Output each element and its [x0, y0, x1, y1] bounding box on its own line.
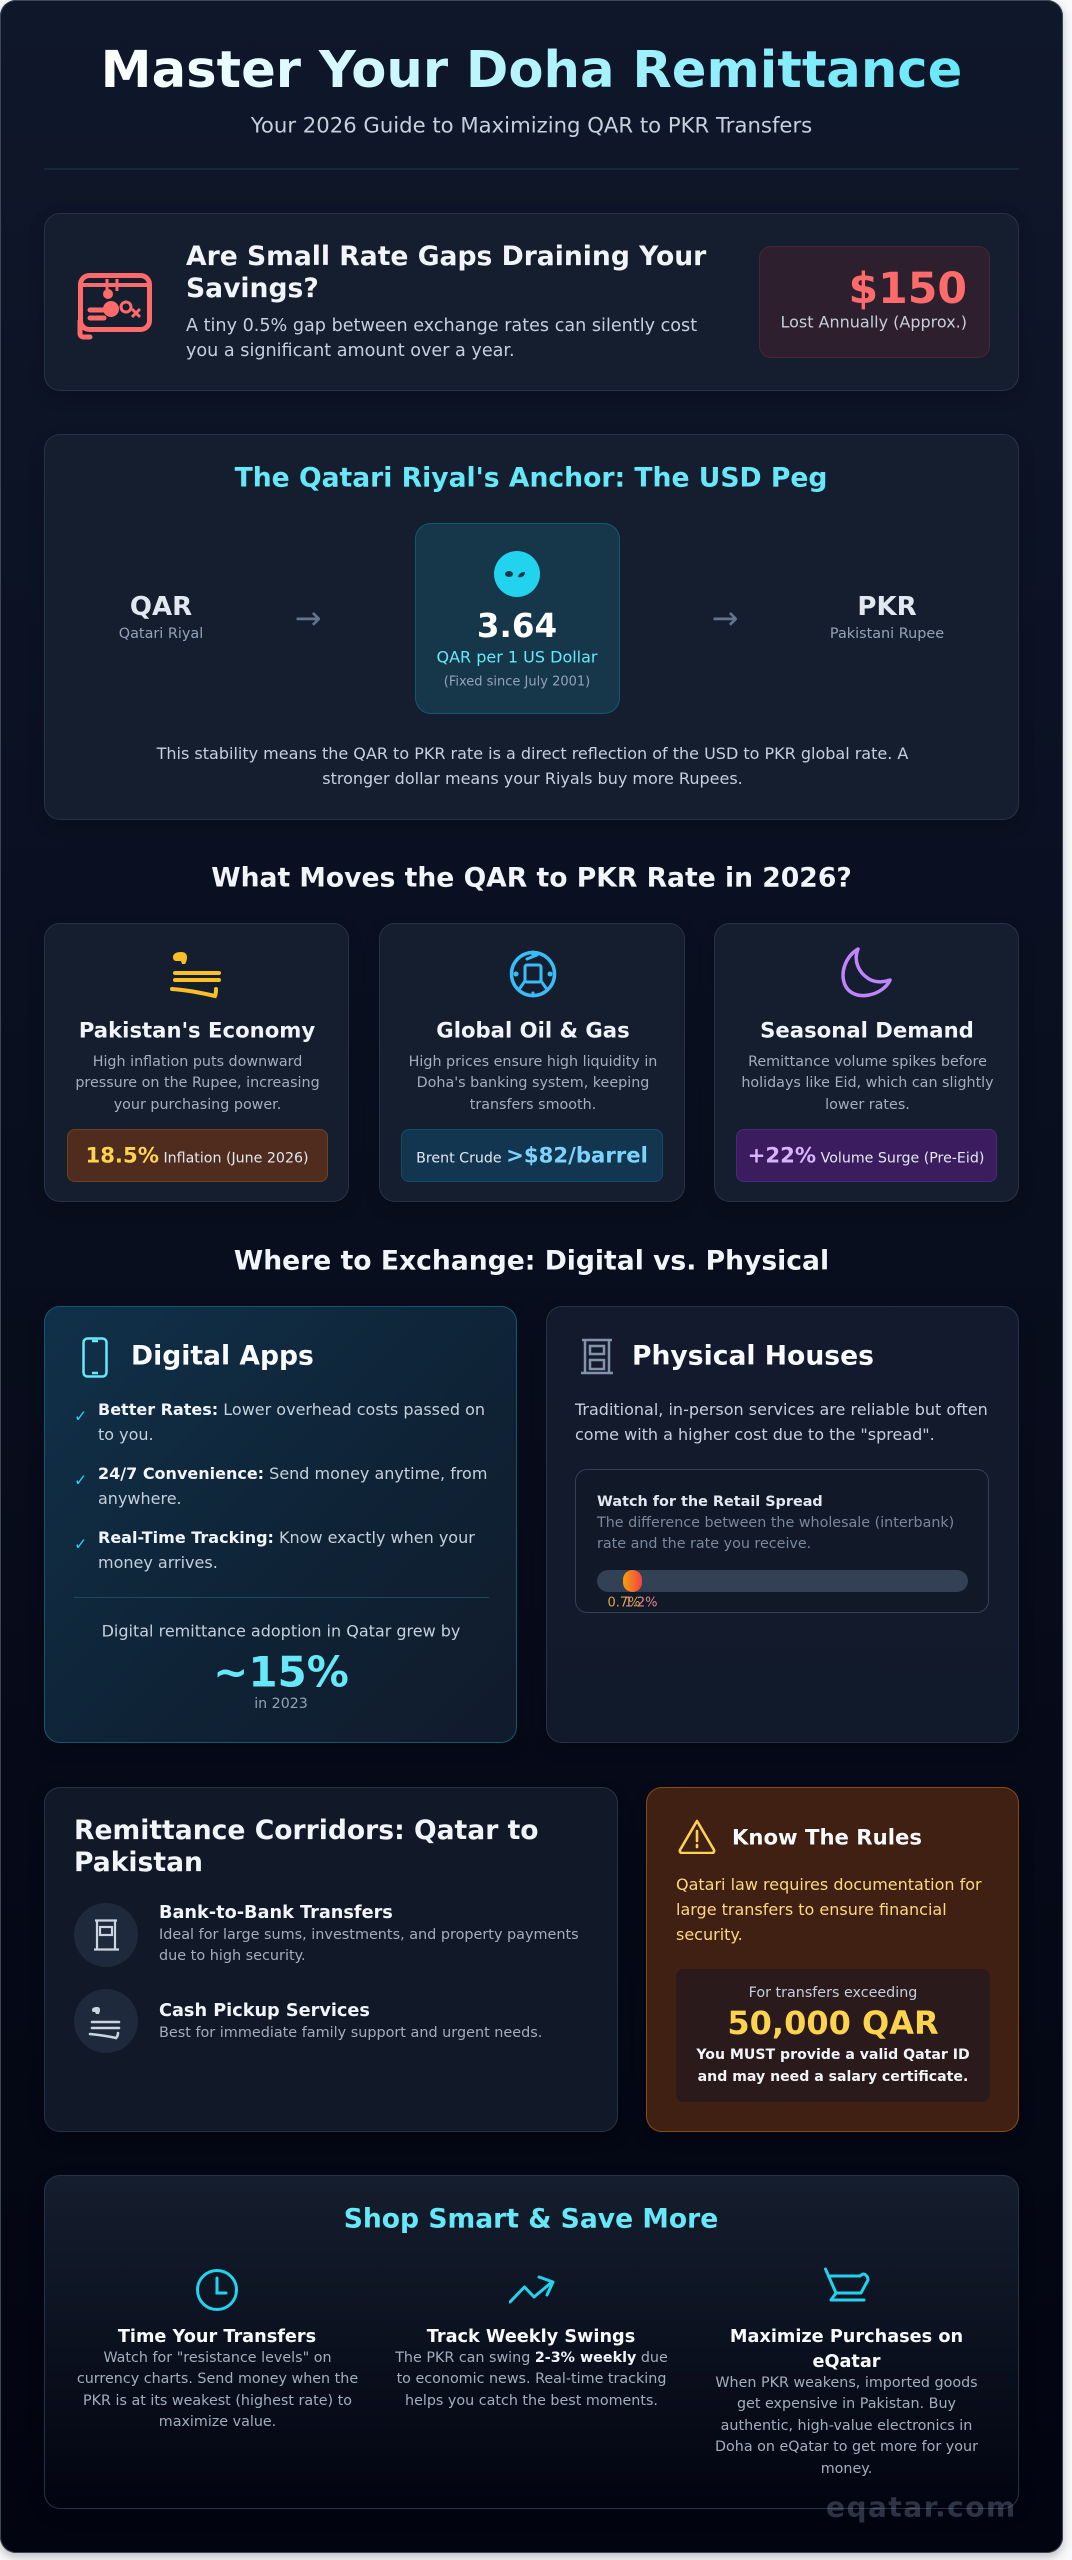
- card description: [409, 1054, 657, 1113]
- threshold value: 50,000 QAR: [727, 2004, 939, 2042]
- card title: Global Oil & Gas: [436, 1018, 630, 1042]
- icon: shopping cart: [824, 2268, 870, 2302]
- description: you a significant amount over a year.: [186, 341, 515, 361]
- box title: Watch for the Retail Spread: [597, 1494, 823, 1510]
- description: large transfers to ensure financial: [676, 1900, 947, 1919]
- description: Traditional, in-person services are reliable but often: [575, 1400, 988, 1419]
- corridor description: due to high security.: [159, 1948, 306, 1964]
- heading: [186, 241, 706, 304]
- spread bar: [597, 1570, 968, 1592]
- card description: High prices ensure high liquidity in: [409, 1054, 657, 1070]
- explanation: This stability means the QAR to PKR rate is a direct reflection of the USD to PKR global rate. A: [157, 744, 908, 763]
- heading: Pakistan: [74, 1847, 203, 1878]
- tip description: Watch for "resistance levels" on: [103, 2350, 332, 2366]
- tip description: maximize value.: [159, 2414, 276, 2430]
- panel: USD peg: [44, 434, 1019, 820]
- QAR label: Qatari Riyal: [119, 626, 203, 642]
- card description: holidays like Eid, which can slightly: [741, 1075, 994, 1091]
- tip title: [730, 2327, 963, 2372]
- peg unit: QAR per 1 US Dollar: [436, 648, 598, 666]
- description: [676, 1875, 982, 1944]
- checklist: to you.: [98, 1425, 154, 1444]
- checklist: anywhere.: [98, 1489, 182, 1508]
- checklist: 24/7 Convenience: Send money anytime, from: [98, 1464, 487, 1483]
- corridor title: Cash Pickup Services: [159, 2001, 370, 2021]
- panel: rate gap problem: [44, 213, 1019, 391]
- arrow: →: [712, 599, 738, 637]
- icon: money lines: [170, 952, 221, 998]
- tip description: get expensive in Pakistan. Buy: [737, 2396, 956, 2412]
- tip description: When PKR weakens, imported goods: [715, 2375, 978, 2391]
- description: Qatari law requires documentation for: [676, 1875, 982, 1894]
- icon: rate gap ticket: [78, 273, 152, 340]
- stat: annual loss: [759, 246, 990, 358]
- tip description: to economic news. Real-time tracking: [397, 2371, 666, 2387]
- PKR label: [830, 592, 944, 642]
- card description: Remittance volume spikes before: [748, 1054, 987, 1070]
- section heading: rate drivers: What Moves the QAR to PKR Rate in 2026?: [211, 862, 852, 894]
- adoption stat: Digital remittance adoption in Qatar grew by: [102, 1622, 460, 1640]
- section heading: where to exchange: Where to Exchange: Digital vs. Physical: [234, 1246, 829, 1276]
- explanation: stronger dollar means your Riyals buy more Rupees.: [322, 769, 743, 788]
- tip description: authentic, high-value electronics in: [721, 2418, 972, 2434]
- panel: physical houses: [546, 1306, 1019, 1743]
- tip description: [715, 2375, 978, 2477]
- heading: [74, 1815, 539, 1878]
- description: come with a higher cost due to the "spread".: [575, 1425, 935, 1444]
- card description: lower rates.: [825, 1097, 910, 1113]
- panel: shop smart: [44, 2175, 1019, 2509]
- box description: The difference between the wholesale (interbank): [597, 1515, 954, 1531]
- adoption stat: in 2023: [254, 1696, 308, 1712]
- checklist: ✓: [74, 1534, 87, 1554]
- card description: Doha's banking system, keeping: [417, 1075, 649, 1091]
- stat badge: [67, 1129, 328, 1182]
- retail spread box: [575, 1469, 989, 1613]
- tip title: Track Weekly Swings: [427, 2327, 635, 2347]
- card description: [75, 1054, 320, 1113]
- icon: clock: [196, 2269, 238, 2311]
- heading: The Qatari Riyal's Anchor: The USD Peg: [235, 462, 827, 494]
- tip description: PKR is at its weakest (highest rate) to: [83, 2393, 352, 2409]
- icon: crescent moon: [841, 947, 892, 998]
- title: Master Your Doha Remittance: [101, 40, 962, 100]
- subtitle: Your 2026 Guide to Maximizing QAR to PKR Transfers: [251, 112, 812, 138]
- QAR label: [119, 592, 203, 642]
- checklist: ✓: [74, 1470, 87, 1490]
- icon: phone: [82, 1337, 108, 1378]
- card description: pressure on the Rupee, increasing: [75, 1075, 320, 1091]
- corridor description: Ideal for large sums, investments, and property payments: [159, 1927, 579, 1943]
- description: [574, 1400, 988, 1444]
- panel: seasonal demand: [714, 923, 1019, 1202]
- icon: bank: [74, 1903, 138, 1967]
- corridor: cash pickup: [74, 1989, 542, 2053]
- PKR label: PKR: [857, 592, 917, 622]
- corridor description: [159, 1927, 579, 1964]
- card title: Pakistan's Economy: [79, 1018, 315, 1042]
- stat value: $150: [848, 264, 967, 314]
- tip title: Time Your Transfers: [118, 2327, 316, 2347]
- description: A tiny 0.5% gap between exchange rates can silently cost: [186, 316, 697, 336]
- peg value: 3.64: [477, 607, 557, 645]
- panel: know the rules: [646, 1787, 1019, 2132]
- icon: globe with car: [510, 950, 556, 998]
- threshold requirement: You MUST provide a valid Qatar ID: [696, 2047, 970, 2063]
- checklist: Real-Time Tracking: Know exactly when your: [98, 1528, 475, 1547]
- card title: Seasonal Demand: [760, 1018, 974, 1042]
- stat badge: [401, 1129, 663, 1182]
- card description: transfers smooth.: [470, 1097, 596, 1113]
- card description: your purchasing power.: [114, 1097, 281, 1113]
- panel: remittance corridors: [44, 1787, 618, 2132]
- stat label: Lost Annually (Approx.): [780, 312, 967, 332]
- tip: weekly swings: [395, 2276, 668, 2409]
- description: security.: [676, 1925, 743, 1944]
- watermark: eqatar.com: [826, 2490, 1017, 2524]
- icon: trend arrow: [509, 2276, 554, 2304]
- tip description: money.: [821, 2461, 872, 2477]
- stat badge: +22% Volume Surge (Pre-Eid): [748, 1142, 984, 1168]
- QAR label: QAR: [130, 592, 192, 622]
- tip description: [77, 2350, 358, 2430]
- icon: cash: [74, 1989, 138, 2053]
- tip title: eQatar: [812, 2352, 881, 2372]
- checklist: money arrives.: [98, 1553, 218, 1572]
- checklist: [74, 1400, 487, 1572]
- card description: [741, 1054, 994, 1113]
- panel title: Digital Apps: [131, 1340, 314, 1372]
- corridor title: Bank-to-Bank Transfers: [159, 1903, 393, 1923]
- tip: eQatar purchases: [715, 2268, 978, 2477]
- adoption stat: [102, 1622, 460, 1712]
- panel: digital apps: [44, 1306, 517, 1743]
- adoption stat: ~15%: [213, 1648, 349, 1696]
- explanation: [156, 744, 908, 788]
- heading: Savings?: [186, 273, 319, 304]
- tip description: Doha on eQatar to get more for your: [715, 2439, 978, 2455]
- heading: Are Small Rate Gaps Draining Your: [186, 241, 706, 272]
- heading: Shop Smart & Save More: [344, 2204, 718, 2234]
- tip description: The PKR can swing 2-3% weekly due: [395, 2350, 668, 2366]
- checklist: Better Rates: Lower overhead costs passed on: [98, 1400, 485, 1419]
- stat badge: [736, 1129, 997, 1182]
- peg note: (Fixed since July 2001): [444, 674, 590, 690]
- threshold requirement: and may need a salary certificate.: [698, 2069, 968, 2085]
- corridor description: Best for immediate family support and urgent needs.: [159, 2025, 542, 2041]
- heading: Remittance Corridors: Qatar to: [74, 1815, 539, 1846]
- panel title: Physical Houses: [632, 1340, 874, 1372]
- panel: Pakistan's economy: [44, 923, 349, 1202]
- stat badge: Brent Crude >$82/barrel: [416, 1142, 648, 1168]
- peg box: [415, 523, 620, 714]
- box description: rate and the rate you receive.: [597, 1536, 811, 1552]
- tip description: helps you catch the best moments.: [405, 2393, 658, 2409]
- tip: time transfers: [77, 2269, 358, 2430]
- tip title: Maximize Purchases on: [730, 2327, 963, 2347]
- checklist: ✓: [74, 1406, 87, 1426]
- threshold requirement: [696, 2047, 970, 2085]
- card description: High inflation puts downward: [93, 1054, 302, 1070]
- icon: globe face: [494, 551, 540, 597]
- box description: [596, 1515, 954, 1552]
- spread high label: 1.2%: [624, 1596, 658, 1610]
- panel title: Know The Rules: [732, 1824, 922, 1850]
- tip description: currency charts. Send money when the: [77, 2371, 358, 2387]
- arrow: →: [295, 599, 321, 637]
- description: [186, 316, 697, 361]
- spread low label: 0.7%: [607, 1596, 641, 1610]
- icon: warning triangle: [678, 1820, 716, 1854]
- icon: building: [581, 1338, 613, 1374]
- PKR label: Pakistani Rupee: [830, 626, 944, 642]
- tip description: [395, 2350, 668, 2409]
- stat badge: 18.5% Inflation (June 2026): [85, 1142, 309, 1168]
- panel: global oil and gas: [379, 923, 685, 1202]
- corridor: bank to bank: [74, 1903, 579, 1967]
- threshold callout: For transfers exceeding: [749, 1985, 917, 2001]
- threshold callout: [676, 1969, 990, 2102]
